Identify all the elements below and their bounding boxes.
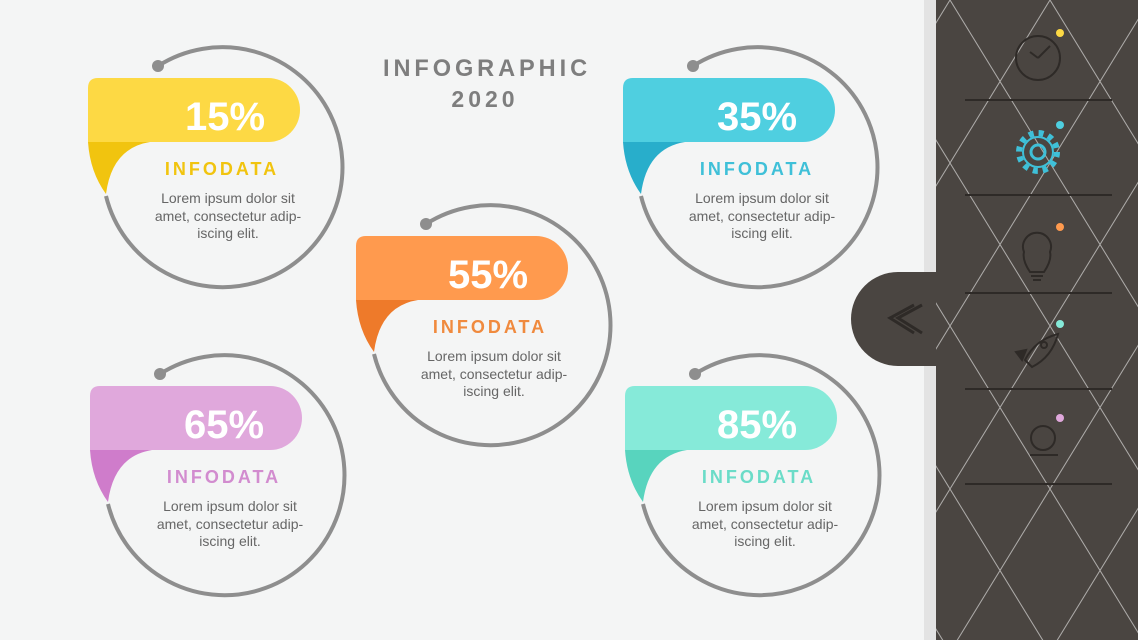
card: 85%: Lorem ipsum dolor sit <box>698 498 832 514</box>
card: 85% <box>625 355 879 595</box>
card: 35%: Lorem ipsum dolor sit <box>695 190 829 206</box>
title <box>383 55 591 112</box>
title: INFOGRAPHIC <box>383 55 591 82</box>
card: 15%: 15% <box>185 95 265 139</box>
card: 35%: 35% <box>717 95 797 139</box>
title: 2020 <box>451 86 519 112</box>
card: 85%: INFODATA <box>702 467 816 487</box>
icon: clock <box>1016 29 1064 80</box>
card: 85%: 85% <box>717 403 797 447</box>
icon: gear <box>1019 121 1064 171</box>
card: 65%: INFODATA <box>167 467 281 487</box>
card: 15%: Lorem ipsum dolor sit <box>161 190 295 206</box>
card: 15% <box>88 47 342 287</box>
icon: rocket <box>1016 320 1064 367</box>
card: 55%: amet, consectetur adip- <box>421 366 567 382</box>
card: 55%: iscing elit. <box>463 383 525 399</box>
card: 35%: iscing elit. <box>731 225 793 241</box>
card: 65% <box>90 355 344 595</box>
card: 35%: INFODATA <box>700 159 814 179</box>
tab: back button <box>851 272 936 366</box>
icon: person <box>1030 414 1064 455</box>
card: 65%: 65% <box>184 403 264 447</box>
card: 55%: Lorem ipsum dolor sit <box>427 348 561 364</box>
card: 35% <box>623 47 877 287</box>
card: 65%: iscing elit. <box>199 533 261 549</box>
card: 85%: iscing elit. <box>734 533 796 549</box>
card: 15%: amet, consectetur adip- <box>155 208 301 224</box>
card: 55%: INFODATA <box>433 317 547 337</box>
card: 65%: Lorem ipsum dolor sit <box>163 498 297 514</box>
card: 85%: amet, consectetur adip- <box>692 516 838 532</box>
card: 15%: iscing elit. <box>197 225 259 241</box>
card: 65%: amet, consectetur adip- <box>157 516 303 532</box>
sidebar <box>924 0 1138 640</box>
card: 55% <box>356 205 610 445</box>
card: 55%: 55% <box>448 253 528 297</box>
card: 15%: INFODATA <box>165 159 279 179</box>
icon: bulb <box>1023 223 1064 280</box>
card: 35%: amet, consectetur adip- <box>689 208 835 224</box>
